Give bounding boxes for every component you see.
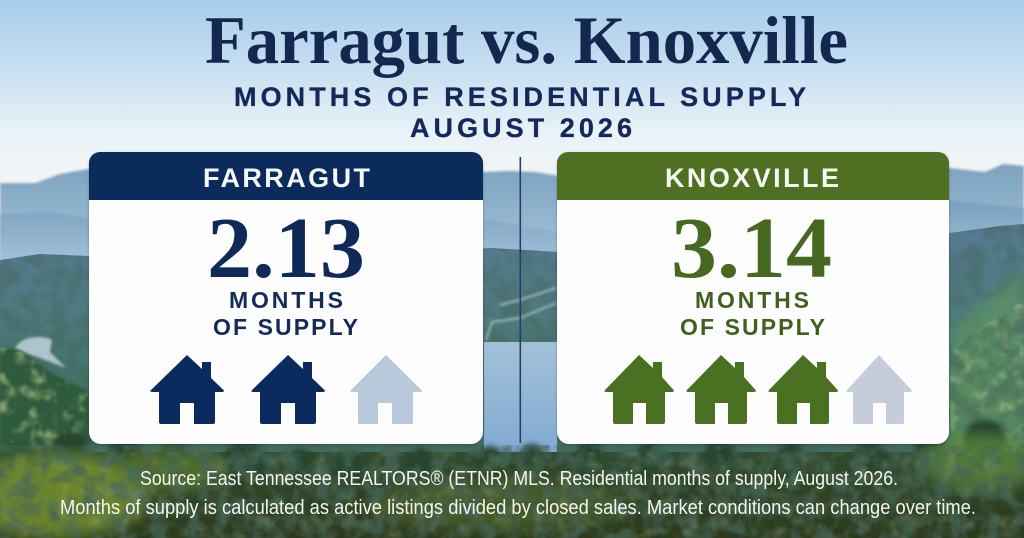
card background (557, 152, 949, 444)
value caption: MONTHS (695, 287, 809, 313)
center divider (520, 157, 521, 443)
right hillside (950, 300, 1024, 442)
card header (89, 152, 483, 200)
subtitle: AUGUST 2026 (410, 113, 632, 143)
header label: KNOXVILLE (665, 163, 839, 193)
left inlet (15, 337, 66, 368)
source note (60, 467, 976, 519)
left hillside (0, 347, 90, 538)
house icons (604, 355, 912, 424)
value: 3.14 (671, 199, 832, 296)
value caption: OF SUPPLY (213, 314, 358, 340)
card header (557, 152, 949, 200)
value caption (680, 287, 825, 340)
source note: Source: East Tennessee REALTORS® (ETNR) MLS. Residential months of supply, August 2026. (140, 467, 898, 490)
value: 2.13 (207, 199, 365, 296)
tree crowns (2, 420, 1007, 480)
lake (484, 342, 557, 460)
house icons (150, 355, 422, 424)
background: sky (0, 0, 1024, 190)
panel: Farragut (89, 152, 483, 444)
foreground forest (0, 420, 1024, 538)
value caption: OF SUPPLY (680, 314, 825, 340)
lake shoreline (486, 288, 556, 340)
value caption: MONTHS (229, 287, 343, 313)
background: mountain landscape (0, 164, 1024, 538)
subtitle: MONTHS OF RESIDENTIAL SUPPLY (234, 82, 806, 112)
value caption (213, 287, 358, 340)
card background (89, 152, 483, 444)
subtitle (234, 82, 806, 143)
title: Farragut vs. Knoxville (205, 2, 848, 78)
header label: FARRAGUT (203, 163, 370, 193)
panel: Knoxville (557, 152, 949, 444)
